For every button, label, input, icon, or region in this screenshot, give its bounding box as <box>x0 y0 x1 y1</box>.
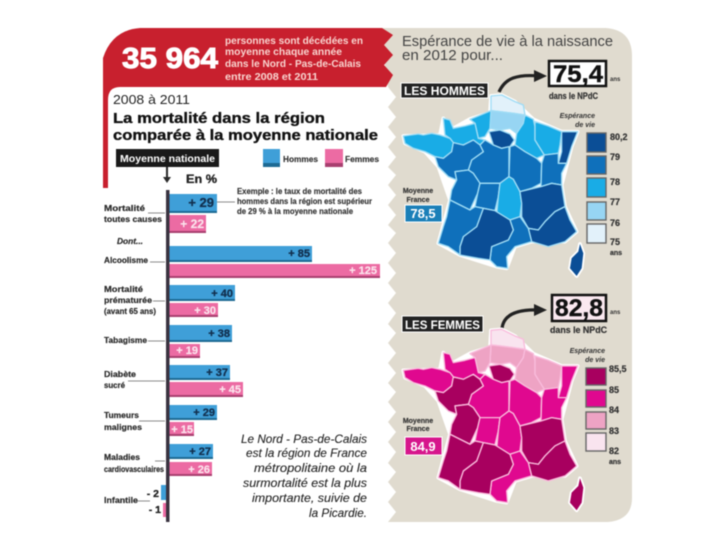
legend: women life expectancy scale: 85,5 <box>609 364 627 374</box>
value: women in Nord - Pas-de-Calais: 82,8 <box>555 295 603 322</box>
arrow: men value to region <box>499 76 540 92</box>
category labels: Dont... <box>117 236 143 246</box>
bars: diabetes: + 37 <box>206 367 228 379</box>
heading: mortality chart: 2008 à 2011 <box>113 92 190 107</box>
map: men life expectancy <box>403 95 583 276</box>
bars: infant mortality: - 2 <box>147 488 159 500</box>
text block: regional conclusion: métropolitaine où la <box>254 461 367 475</box>
bars: alcoholism: + 85 <box>288 248 310 260</box>
category labels: cardiovasculaires <box>104 464 164 474</box>
heading: life expectancy: en 2012 pour... <box>402 47 503 64</box>
map: women life expectancy <box>403 329 583 510</box>
category labels: Tabagisme <box>104 335 147 345</box>
category labels: Tumeurs <box>104 410 139 420</box>
unit label: En % <box>186 172 217 186</box>
legend: women life expectancy scale <box>570 348 627 466</box>
label: men: LES HOMMES <box>404 84 485 98</box>
bars: smoking <box>168 325 232 358</box>
text block: regional conclusion: la Picardie. <box>309 506 367 520</box>
category labels: Alcoolisme <box>104 255 148 265</box>
legend: men life expectancy scale: 75 <box>610 237 620 247</box>
category labels: sucré <box>104 380 125 390</box>
headline description: personnes sont décédées en <box>225 35 363 47</box>
legend: men life expectancy scale: de vie <box>575 122 595 129</box>
bar chart <box>147 190 380 522</box>
callout: chart example: Exemple : le taux de mortalité des <box>237 187 363 196</box>
legend: men life expectancy scale: ans <box>610 250 622 257</box>
bars: malignant tumours <box>168 405 217 436</box>
bars: premature mortality: + 30 <box>194 305 216 317</box>
arrow: national average to axis <box>163 167 171 183</box>
bars: alcoholism <box>168 246 380 278</box>
text block: regional conclusion <box>241 432 367 520</box>
bars: malignant tumours: + 15 <box>171 424 193 436</box>
callout: chart example: hommes dans la région est supérieur <box>237 197 372 206</box>
value: France average women <box>403 418 442 455</box>
legend: men and women: Hommes <box>283 155 319 164</box>
value: men in Nord - Pas-de-Calais: ans <box>610 77 621 83</box>
value: France average men: 78,5 <box>410 206 436 221</box>
regions <box>403 329 583 510</box>
bars: infant mortality: - 1 <box>149 504 161 516</box>
bars: smoking: + 19 <box>176 345 198 357</box>
value: France average men: France <box>407 197 430 204</box>
heading: mortality chart <box>113 92 378 144</box>
legend: women life expectancy scale: 82 <box>609 446 619 456</box>
value: women in Nord - Pas-de-Calais: dans le NPdC <box>550 325 607 335</box>
category labels: (avant 65 ans) <box>104 306 156 316</box>
axis: national average <box>166 190 170 522</box>
value: men in Nord - Pas-de-Calais: 75,4 <box>553 61 604 88</box>
value: France average women: Moyenne <box>403 418 433 425</box>
heading: mortality chart: comparée à la moyenne nationale <box>113 127 378 144</box>
national average tag <box>116 149 219 167</box>
headline number: 35 964 <box>122 43 218 75</box>
heading: life expectancy <box>402 33 613 64</box>
bars: malignant tumours: + 29 <box>193 407 215 419</box>
bars: all causes <box>168 194 217 233</box>
map outline <box>403 95 583 276</box>
legend: men life expectancy scale: 78 <box>610 177 620 187</box>
legend: women life expectancy scale: de vie <box>585 357 605 364</box>
value: women in Nord - Pas-de-Calais <box>550 295 621 335</box>
bars: smoking: + 38 <box>208 328 230 340</box>
category labels: Maladies <box>104 452 140 462</box>
legend: women life expectancy scale: 83 <box>609 426 619 436</box>
bars: diabetes <box>168 365 243 397</box>
bars: all causes: + 22 <box>180 217 204 231</box>
callout: chart example <box>217 187 372 216</box>
legend: women life expectancy scale: 84 <box>609 405 619 415</box>
legend: men and women <box>263 149 380 167</box>
legend: women life expectancy scale: ans <box>609 459 621 466</box>
map outline <box>403 329 583 510</box>
legend: men life expectancy scale: 77 <box>610 197 620 207</box>
bars: premature mortality <box>168 285 235 317</box>
text block: regional conclusion: est la région de France <box>246 446 367 460</box>
category labels: Mortalité <box>104 284 143 294</box>
bars: cardiovascular diseases <box>168 444 213 476</box>
panel: red header banner <box>103 28 393 188</box>
category labels: Infantile <box>104 495 138 505</box>
legend: women life expectancy scale: Espérance <box>570 348 605 355</box>
bars: infant mortality <box>147 485 167 517</box>
bars: premature mortality: + 40 <box>211 288 233 300</box>
label: women: LES FEMMES <box>405 318 480 332</box>
arrowhead: men <box>534 70 547 82</box>
bars: cardiovascular diseases: + 26 <box>188 464 210 476</box>
legend: men life expectancy scale <box>560 113 628 257</box>
value: France average men <box>403 188 442 222</box>
value: France average men: Moyenne <box>403 188 433 195</box>
callout: chart example: de 29 % à la moyenne nationale <box>237 207 354 216</box>
value: France average women: 84,9 <box>410 439 436 454</box>
bars: diabetes: + 45 <box>219 384 241 396</box>
arrow: women value to region <box>502 310 540 329</box>
category labels: prématurée <box>104 295 152 305</box>
heading: life expectancy: Espérance de vie à la naissance <box>402 33 613 50</box>
bars: cardiovascular diseases: + 27 <box>189 446 211 458</box>
headline description: dans le Nord - Pas-de-Calais <box>225 58 361 70</box>
category labels: Mortalité <box>104 203 145 213</box>
text block: regional conclusion: surmortalité est la plus <box>243 476 367 490</box>
headline description: moyenne chaque année <box>225 46 342 58</box>
category labels: malignes <box>104 422 142 432</box>
panel: life expectancy background <box>380 28 632 522</box>
value: women in Nord - Pas-de-Calais: ans <box>610 310 621 316</box>
heading: mortality chart: La mortalité dans la région <box>113 110 325 127</box>
category labels: Diabète <box>104 369 136 379</box>
category labels <box>104 203 165 505</box>
bars: alcoholism: + 125 <box>349 265 377 277</box>
value: men in Nord - Pas-de-Calais <box>549 61 621 101</box>
legend: men life expectancy scale: 79 <box>610 152 620 162</box>
national average tag: Moyenne nationale <box>120 154 215 165</box>
bars: all causes: + 29 <box>188 195 214 210</box>
value: men in Nord - Pas-de-Calais: dans le NPdC <box>549 91 598 101</box>
arrowhead: women <box>534 304 547 316</box>
value: France average women: France <box>407 426 430 433</box>
legend: women life expectancy scale: 85 <box>609 385 619 395</box>
text block: regional conclusion: Le Nord - Pas-de-Calais <box>241 432 367 446</box>
regions <box>403 95 583 276</box>
headline description <box>225 35 363 83</box>
legend: men life expectancy scale: Espérance <box>560 113 595 120</box>
category labels: toutes causes <box>104 214 162 224</box>
legend: men life expectancy scale: 80,2 <box>610 132 628 142</box>
legend: men life expectancy scale: 76 <box>610 218 620 228</box>
legend: men and women: Femmes <box>345 155 380 164</box>
headline description: entre 2008 et 2011 <box>225 71 318 83</box>
text block: regional conclusion: importante, suivie de <box>252 491 367 505</box>
